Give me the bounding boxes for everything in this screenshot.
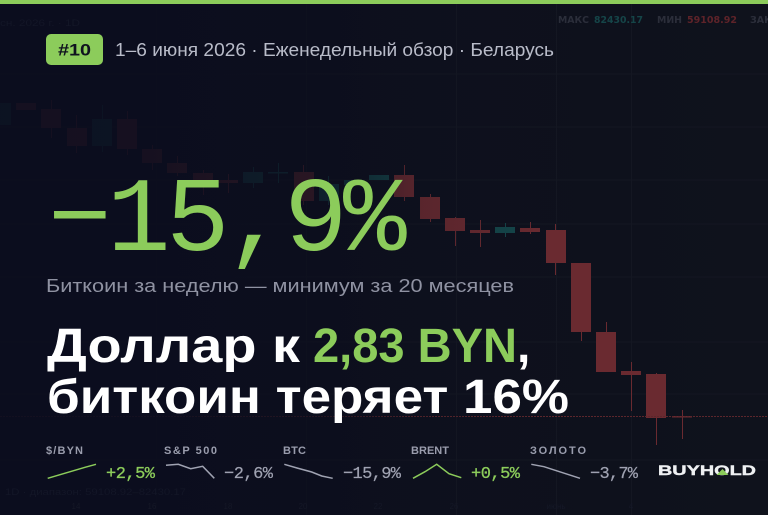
faint chart range note: 1D · диапазон: 59108.92–82430.17 <box>5 487 186 498</box>
date and issue line: 1–6 июня 2026 · Еженедельный обзор · Беларусь <box>115 40 554 60</box>
big number: −15,9% <box>48 162 407 282</box>
chart header stats: 82430.17 <box>594 15 643 26</box>
ticker: Brent: BRENT <box>411 445 449 457</box>
chart header stats <box>558 15 768 26</box>
ticker: USD/BYN: $/BYN <box>46 445 83 457</box>
logo: BUYHOLD: BUYHOLD <box>658 462 756 478</box>
ticker: USD/BYN <box>46 445 156 484</box>
candlestick chart background <box>0 100 768 445</box>
faint axis labels <box>72 502 634 511</box>
headline: биткоин теряет 16% <box>47 371 569 424</box>
faint axis labels: 22 <box>374 502 383 511</box>
headline: 2,83 BYN <box>313 320 517 373</box>
ticker: BTC <box>283 445 402 484</box>
headline <box>47 320 569 424</box>
headline: Доллар к <box>47 320 301 373</box>
top accent bar <box>0 0 768 4</box>
ticker: Brent <box>411 445 521 484</box>
ticker: Brent: +0,5% <box>471 465 521 484</box>
ticker: BTC: BTC <box>283 445 306 457</box>
ticker: gold <box>530 445 639 484</box>
ticker: gold: −3,7% <box>590 465 639 484</box>
subtitle: Биткоин за неделю — минимум за 20 месяцев <box>46 276 514 296</box>
faint axis labels: 20 <box>299 502 308 511</box>
faint axis labels: 14 <box>72 502 81 511</box>
faint axis labels: 16 <box>148 502 157 511</box>
ticker: S&P 500: S&P 500 <box>164 445 217 457</box>
ticker: BTC: −15,9% <box>343 465 402 484</box>
faint axis labels: 4 <box>629 502 634 511</box>
issue badge <box>46 34 103 65</box>
ticker: gold: ЗОЛОТО <box>530 445 586 457</box>
faint axis labels: 26 <box>450 502 459 511</box>
ticker: S&P 500: −2,6% <box>224 465 274 484</box>
faint axis labels: июнь <box>546 502 566 511</box>
issue badge: #10 <box>58 42 91 60</box>
headline: , <box>517 320 530 373</box>
ticker: USD/BYN: +2,5% <box>106 465 156 484</box>
faint chart caption: сн. 2026 г. · 1D <box>0 18 80 29</box>
chart header stats: МИН <box>657 15 682 26</box>
chart header stats: 59108.92 <box>687 15 737 26</box>
ticker: S&P 500 <box>164 445 274 484</box>
chart header stats: МАКС <box>558 15 589 26</box>
faint axis labels: 18 <box>224 502 233 511</box>
